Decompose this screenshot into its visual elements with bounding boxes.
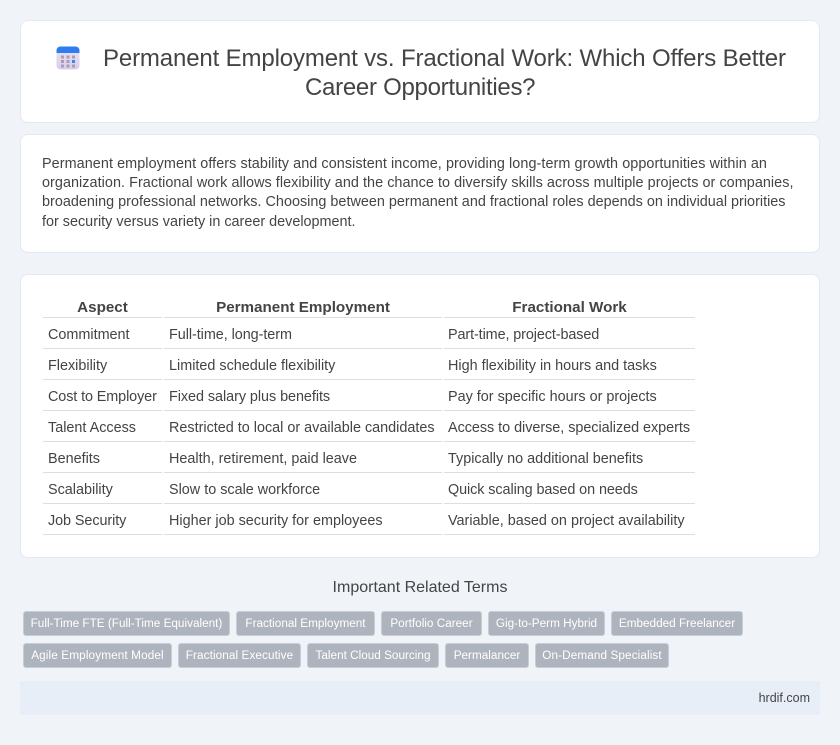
- table row: commitment: Full-time, long-term: [169, 327, 292, 343]
- table row: job security: [48, 513, 685, 529]
- related term tags: Full-Time FTE (Full-Time Equivalent): [31, 617, 222, 630]
- table row: benefits: Benefits: [48, 451, 100, 467]
- related term tags: [23, 611, 743, 668]
- table row: scalability: Quick scaling based on needs: [448, 482, 638, 498]
- table header: Fractional Work: [512, 299, 627, 316]
- text block: introduction: Permanent employment offers stability and consistent income, providing long-term growth opportunities within an: [42, 156, 767, 172]
- table row: talent access: [48, 420, 690, 436]
- table row: scalability: Scalability: [48, 482, 113, 498]
- table row: scalability: [48, 482, 638, 498]
- related term tags: Permalancer: [454, 649, 520, 662]
- panel: header: [20, 20, 820, 123]
- table row: cost to employer: [48, 389, 657, 405]
- text block: introduction: for security versus variety in career development.: [42, 214, 356, 230]
- table row: commitment: Part-time, project-based: [448, 327, 599, 343]
- table row: job security: Variable, based on project availability: [448, 513, 685, 529]
- table header: Permanent Employment: [216, 299, 390, 316]
- table row: scalability: Slow to scale workforce: [169, 482, 320, 498]
- table header: Aspect: [77, 299, 128, 316]
- related term tags: On-Demand Specialist: [542, 649, 662, 662]
- table row: cost to employer: Pay for specific hours or projects: [448, 389, 657, 405]
- table row: flexibility: High flexibility in hours and tasks: [448, 358, 657, 374]
- panel: introduction: [20, 134, 820, 253]
- table row: cost to employer: Fixed salary plus benefits: [169, 389, 330, 405]
- table header: [77, 299, 627, 316]
- table row: job security: Higher job security for employees: [169, 513, 383, 529]
- table row: commitment: [48, 327, 599, 343]
- related term tags: Gig-to-Perm Hybrid: [496, 617, 597, 630]
- title: Permanent Employment vs. Fractional Work: Which Offers Better: [103, 45, 786, 72]
- heading: related terms: Important Related Terms: [333, 579, 507, 596]
- table row: cost to employer: Cost to Employer: [48, 389, 157, 405]
- text block: introduction: [42, 156, 794, 230]
- text block: introduction: broadening professional networks. Choosing between permanent and fractional roles depends on individual priorities: [42, 194, 786, 210]
- panel: comparison table: [20, 274, 820, 558]
- table row: commitment: Commitment: [48, 327, 130, 343]
- table row: benefits: Health, retirement, paid leave: [169, 451, 357, 467]
- title: [103, 45, 786, 101]
- table row: benefits: [48, 451, 643, 467]
- related term tags: Embedded Freelancer: [619, 617, 735, 630]
- related term tags: Portfolio Career: [390, 617, 473, 630]
- title: Career Opportunities?: [305, 74, 535, 101]
- footer: [20, 681, 820, 715]
- table row: job security: Job Security: [48, 513, 126, 529]
- table row: benefits: Typically no additional benefits: [448, 451, 643, 467]
- related term tags: Fractional Executive: [186, 649, 293, 662]
- text block: introduction: organization. Fractional work allows flexibility and the chance to diversify skills across multiple projects or companies,: [42, 175, 794, 191]
- table row: flexibility: Limited schedule flexibility: [169, 358, 335, 374]
- related term tags: Agile Employment Model: [31, 649, 164, 662]
- table row: talent access: Access to diverse, specialized experts: [448, 420, 690, 436]
- footer source: hrdif.com: [759, 690, 810, 704]
- related term tags: Talent Cloud Sourcing: [316, 649, 430, 662]
- table row: flexibility: [48, 358, 657, 374]
- icon: calendar: [56, 46, 80, 70]
- table row: flexibility: Flexibility: [48, 358, 107, 374]
- table row: talent access: Restricted to local or available candidates: [169, 420, 435, 436]
- table row: talent access: Talent Access: [48, 420, 136, 436]
- related term tags: Fractional Employment: [245, 617, 366, 630]
